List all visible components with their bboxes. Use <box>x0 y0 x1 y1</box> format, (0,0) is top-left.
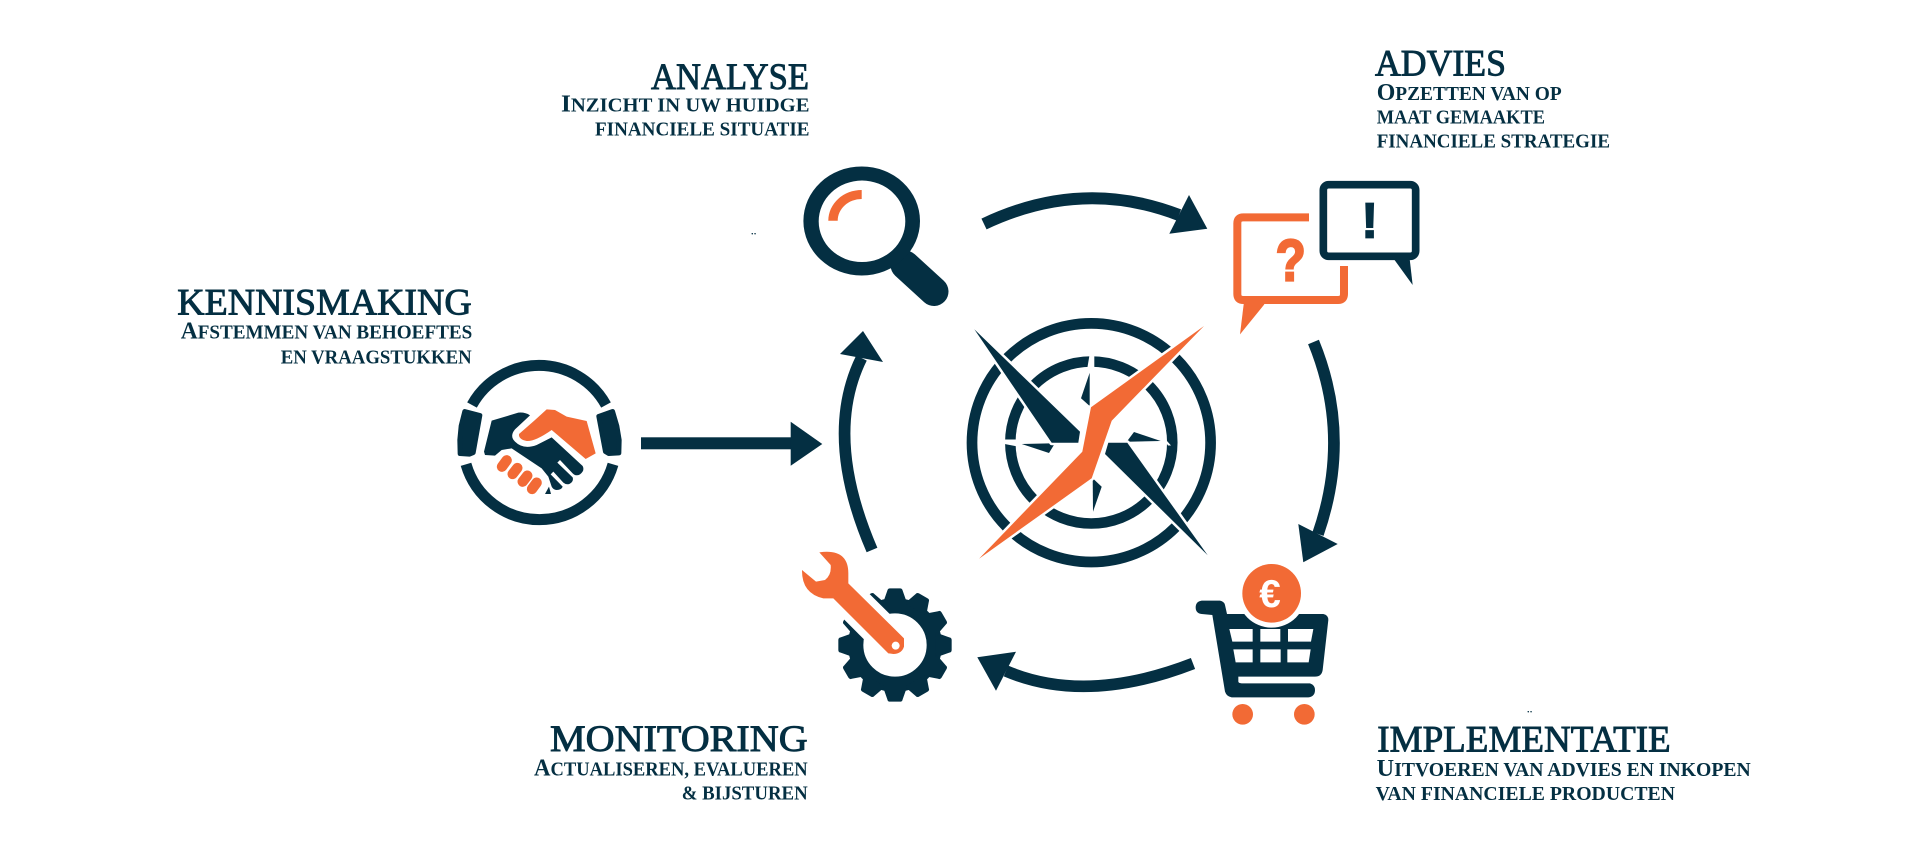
text: kennismaking description line 2: EN VRAAGSTUKKEN <box>281 347 472 368</box>
text: implementatie description line 1: UITVOEREN VAN ADVIES EN INKOPEN <box>1377 756 1751 782</box>
icon: magnifying glass <box>803 166 934 292</box>
arrow: analyse to advies <box>984 195 1207 234</box>
gear <box>838 588 952 702</box>
stray marks near implementatie: ¨ <box>1527 708 1532 725</box>
handshake ring <box>466 365 613 520</box>
cart basket openings <box>1229 629 1313 662</box>
text: implementatie description line 2: VAN FINANCIELE PRODUCTEN <box>1376 784 1675 805</box>
wrench <box>802 552 904 654</box>
icon: shopping cart with euro coin: € <box>1259 573 1281 616</box>
compass rings <box>972 323 1211 562</box>
text: advies description line 3: FINANCIELE STRATEGIE <box>1377 131 1610 152</box>
cart wheels <box>1232 704 1315 725</box>
compass orange needle <box>979 326 1204 559</box>
heading: implementatie: IMPLEMENTATIE <box>1377 720 1671 761</box>
text block: monitoring <box>534 719 808 804</box>
heading: monitoring: MONITORING <box>550 719 808 760</box>
stray marks near analyse: ¨ <box>751 230 756 247</box>
handshake orange fingers <box>502 460 537 489</box>
arrow: kennismaking to cycle <box>641 422 822 466</box>
orange speech bubble: ? <box>1276 228 1306 293</box>
navy speech bubble <box>1323 185 1416 285</box>
text: monitoring description line 2: & BIJSTUREN <box>682 783 808 804</box>
icon: gear and wrench <box>802 552 952 702</box>
heading: kennismaking: KENNISMAKING <box>177 282 472 323</box>
text: advies description line 2: MAAT GEMAAKTE <box>1377 107 1545 128</box>
icon: handshake <box>460 365 619 520</box>
text: analyse description line 2: FINANCIELE SITUATIE <box>595 120 810 141</box>
handshake navy hand <box>484 413 583 490</box>
arrow: advies to implementatie <box>1298 342 1338 562</box>
euro coin <box>1237 559 1306 628</box>
icon: speech bubbles <box>1237 185 1416 334</box>
text: analyse description line 1: INZICHT IN UW HUIDGE <box>561 92 810 118</box>
compass dark needles <box>974 329 1208 555</box>
handshake side pads <box>460 411 619 454</box>
text: advies description line 1: OPZETTEN VAN OP <box>1377 80 1562 106</box>
heading: advies: ADVIES <box>1375 44 1506 85</box>
orange speech bubble <box>1237 217 1344 334</box>
heading: analyse: ANALYSE <box>651 57 809 98</box>
compass small points <box>1022 373 1161 512</box>
text: kennismaking description line 1: AFSTEMMEN VAN BEHOEFTES <box>181 318 472 344</box>
text block: implementatie <box>1376 720 1751 805</box>
text block: kennismaking <box>177 282 472 368</box>
text: monitoring description line 1: ACTUALISEREN, EVALUEREN <box>534 756 808 782</box>
navy speech bubble: ! <box>1361 193 1378 248</box>
handshake orange hand <box>519 409 596 459</box>
text block: analyse <box>561 57 810 141</box>
text block: advies <box>1375 44 1610 152</box>
cart body <box>1196 601 1328 697</box>
arrow: implementatie to monitoring <box>977 652 1193 691</box>
icon: compass <box>972 323 1211 562</box>
arrow: monitoring to analyse <box>840 331 883 550</box>
icon: shopping cart with euro coin <box>1196 559 1328 725</box>
